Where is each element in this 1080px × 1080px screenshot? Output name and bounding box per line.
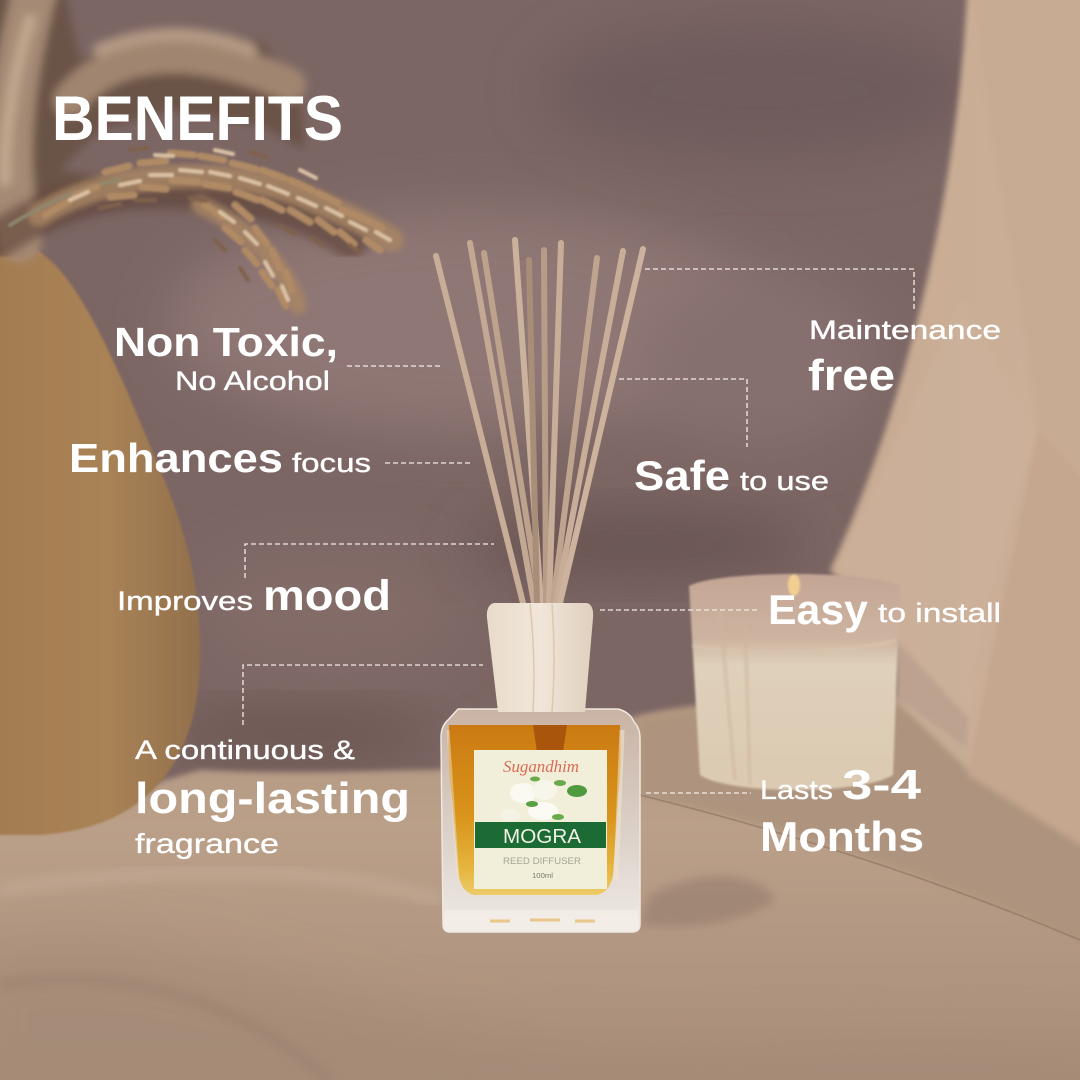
product label <box>474 750 607 889</box>
benefit: safe to use: Safe <box>634 452 730 499</box>
benefit: lasts 3-4 months <box>646 761 924 860</box>
product label: Sugandhim <box>503 757 579 776</box>
benefit: long-lasting fragrance: A continuous & <box>135 735 355 765</box>
benefit: lasts 3-4 months: 3-4 <box>842 761 922 808</box>
right draped cloth <box>830 0 1080 880</box>
benefit: maintenance free <box>645 269 1001 400</box>
vase <box>0 247 200 835</box>
benefit: lasts 3-4 months: Months <box>760 813 924 860</box>
benefit: improves mood: Improves <box>117 586 253 616</box>
benefit: non toxic: No Alcohol <box>175 366 330 396</box>
benefit: easy to install: Easy <box>768 586 869 633</box>
benefit: easy to install: to install <box>878 598 1001 628</box>
product label: MOGRA <box>503 826 582 848</box>
benefit: maintenance free: Maintenance <box>809 315 1001 345</box>
benefit: easy to install <box>600 586 1001 633</box>
benefit: long-lasting fragrance <box>135 665 483 859</box>
benefit: long-lasting fragrance: long-lasting <box>135 774 410 823</box>
benefit: improves mood <box>117 544 494 620</box>
benefit: enhances focus <box>69 435 472 481</box>
foreground stalks <box>0 148 392 306</box>
amber liquid <box>448 725 621 895</box>
benefit: enhances focus: focus <box>292 448 371 478</box>
benefit: safe to use: to use <box>740 466 829 496</box>
benefit: maintenance free: free <box>808 351 895 400</box>
product label: 100ml <box>532 873 553 880</box>
title: BENEFITS <box>52 84 343 154</box>
wooden cap <box>487 603 593 712</box>
benefit: long-lasting fragrance: fragrance <box>135 828 279 859</box>
benefit: improves mood: mood <box>263 572 391 620</box>
flower illustration <box>500 776 587 821</box>
benefit: non toxic <box>114 319 443 396</box>
benefit: safe to use <box>619 379 829 499</box>
product label: REED DIFFUSER <box>503 856 581 867</box>
benefit: non toxic: Non Toxic, <box>114 319 338 365</box>
dried pampas grass <box>0 0 392 306</box>
benefit: enhances focus: Enhances <box>69 435 283 481</box>
blurred upper plumes <box>0 0 305 250</box>
candle <box>689 574 900 790</box>
diffuser bottle <box>441 603 640 932</box>
bottle glass <box>441 709 640 932</box>
reed sticks <box>436 240 643 603</box>
fabric floor <box>0 699 1080 1080</box>
background wall <box>0 0 1080 820</box>
benefit: lasts 3-4 months: Lasts <box>760 775 833 805</box>
